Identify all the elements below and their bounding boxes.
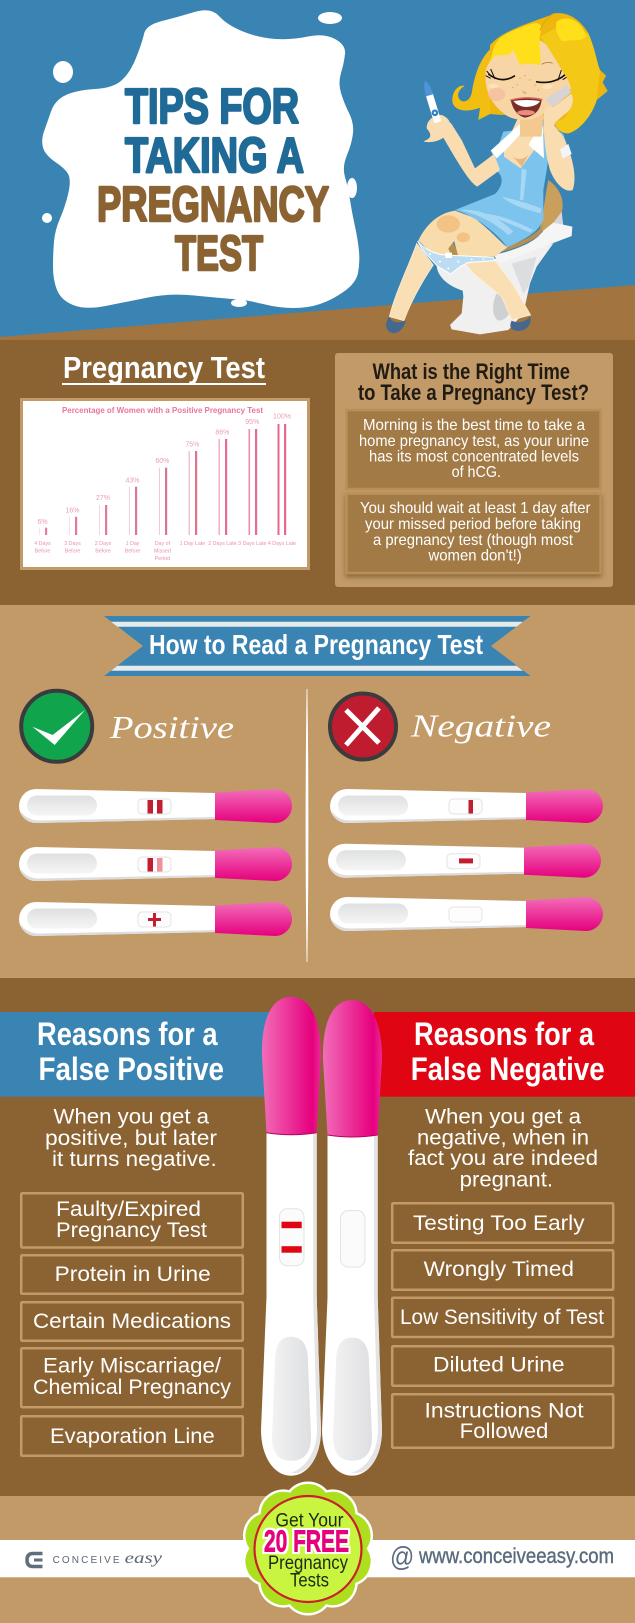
panel heading: to Take a Pregnancy Test? [358,380,589,405]
ribbon heading: How to Read a Pregnancy Test [149,629,483,660]
bar values: 75% [185,442,199,449]
badge: 20 free pregnancy tests: Pregnancy [268,1553,348,1574]
logo: Conceive Easy: easy [125,1550,163,1567]
list: false positive reasons: Faulty/Expired [56,1197,201,1221]
title: TIPS FOR [125,80,299,134]
list: false positive reasons: Protein in Urine [55,1262,211,1286]
legs [389,211,531,321]
axis labels [34,541,296,562]
list: false negative reasons: Wrongly Timed [424,1257,574,1281]
hand with phone [545,85,571,107]
text: false negative definition: fact you are indeed [408,1147,598,1170]
panel: header background [0,0,635,340]
website: @ [390,1541,414,1572]
text: false negative definition: negative, when in [417,1126,589,1149]
bar values: 60% [155,458,169,465]
axis labels: 4 Days [34,541,51,547]
bar values: 27% [96,495,110,502]
tip: morning: has its most concentrated levels [369,449,579,466]
icon: negative cross [330,694,396,760]
logo: Conceive Easy [27,1550,163,1567]
panel: pregnancy test chart and timing [0,340,635,605]
panel: footer [0,1496,635,1623]
list: false positive reasons [21,1193,243,1456]
bars [39,424,286,535]
test: negative empty window [330,897,603,931]
website: www.conceiveeasy.com [418,1545,614,1568]
badge: 20 free pregnancy tests: Tests [290,1571,329,1592]
text: false positive definition: When you get a [54,1105,209,1128]
panel heading: What is the Right Time [372,359,570,384]
axis labels: Day of [155,541,171,547]
test: positive plus sign [19,902,292,936]
axis labels: 1 Day Late [180,541,205,547]
bar values [37,414,291,526]
eyes [486,62,568,82]
axis labels: 3 Days Late [238,541,266,547]
band: false negative [374,1012,635,1097]
underwear [418,241,495,274]
tip: morning: Morning is the best time to take a [363,417,585,434]
axis labels: 1 Day [126,541,140,547]
cheeks [488,84,552,101]
title: TEST [175,227,263,281]
ribbon heading [104,616,530,676]
list: false positive reasons: Pregnancy Test [56,1218,207,1242]
freckles and nose [512,75,539,94]
tip: wait [346,494,600,573]
axis labels: Before [125,548,140,554]
axis labels: Missed [154,548,171,554]
list: false negative reasons: Low Sensitivity of Test [400,1305,604,1329]
text: false positive definition: positive, but later [45,1127,217,1150]
list: false positive reasons: Certain Medications [33,1309,231,1333]
axis labels: Before [35,548,50,554]
logo: Conceive Easy: CONCEIVE [53,1555,120,1566]
test: negative one line [330,789,603,823]
band: false positive: Reasons for a [37,1016,218,1052]
tip: wait: a pregnancy test (though most [373,532,574,549]
badge: 20 free pregnancy tests: Get Your [275,1511,344,1532]
band: false positive: False Positive [38,1051,224,1087]
list: false positive reasons: Chemical Pregnancy [33,1375,231,1399]
badge: 20 free pregnancy tests: 20 FREE [264,1524,349,1558]
badge: 20 free pregnancy tests [244,1483,372,1614]
tip: wait: women don't!) [428,548,522,565]
list: false negative reasons: Testing Too Early [413,1211,585,1235]
list: false negative reasons: Diluted Urine [433,1353,565,1377]
bar chart: percentage of women with a positive test [22,400,308,568]
list: false negative reasons: Followed [460,1419,548,1443]
side hair [540,28,600,133]
head group [485,13,608,137]
test: vertical positive [261,997,321,1476]
shoes [386,317,531,333]
label: Positive: Positive [109,709,234,745]
test: positive faint line [19,847,292,881]
arm holding test [422,80,500,187]
text: false negative definition: pregnant. [460,1169,553,1192]
axis labels: 3 Days [64,541,81,547]
bar values: 86% [215,430,229,437]
text: false negative definition: When you get a [425,1105,581,1128]
floor [0,285,635,341]
test: negative minus sign [328,844,601,878]
axis labels: 4 Days Late [268,541,296,547]
title [97,80,329,281]
test: positive two lines [19,789,292,823]
axis labels: 2 Days Late [208,541,237,547]
title: TAKING A [125,129,304,183]
bar values: 95% [245,419,259,426]
band: false negative: Reasons for a [414,1016,594,1052]
hair base [490,13,608,133]
bar values: 43% [125,478,140,485]
illustration: woman on toilet holding a test [386,13,608,334]
bar values: 16% [65,508,80,515]
mouth [510,98,542,118]
bangs [490,23,541,65]
tip: morning: of hCG. [452,464,501,481]
chart title: Percentage of Women with a Positive Pregnancy Test [62,406,263,415]
axis labels: Before [65,548,80,554]
axis labels: Period [155,556,170,562]
divider [306,689,308,962]
tip: morning [346,410,600,489]
test: vertical negative [322,1000,382,1476]
title splash blob [42,10,359,308]
axis labels: Before [95,548,111,554]
chest and collar [491,115,544,168]
website [390,1541,614,1572]
panel: false results [0,978,635,1496]
tip: morning: home pregnancy test, as your urine [359,433,589,450]
tip: wait: your missed period before taking [365,516,581,533]
hair: left curl [452,45,510,120]
panel: how to read a test [0,605,635,978]
heading: Pregnancy Test: Pregnancy Test [63,350,265,385]
list: false positive reasons: Evaporation Line [50,1424,215,1448]
list: false negative reasons: Instructions Not [424,1399,584,1423]
bar values: 100% [273,414,291,421]
band: false positive [0,1012,270,1097]
panel heading [358,359,589,405]
text: false positive definition: it turns negative. [52,1148,217,1171]
neck [520,115,543,137]
text: false negative definition [408,1105,598,1192]
list: false positive reasons: Early Miscarriage/ [43,1354,221,1378]
bar values: 6% [37,519,48,526]
dress [455,127,571,247]
footer strip [0,1540,635,1577]
list: false negative reasons [392,1203,613,1448]
label: Negative: Negative [410,708,551,744]
title: PREGNANCY [97,178,329,232]
forearm on phone [544,117,574,191]
panel: right time to take a test [335,353,613,587]
toilet [437,180,572,334]
text: false positive definition [45,1105,217,1171]
axis labels: 2 Days [95,541,112,547]
icon: positive check [21,691,92,762]
band: false negative: False Negative [411,1051,605,1087]
tip: wait: You should wait at least 1 day after [360,500,591,517]
face [485,38,572,120]
